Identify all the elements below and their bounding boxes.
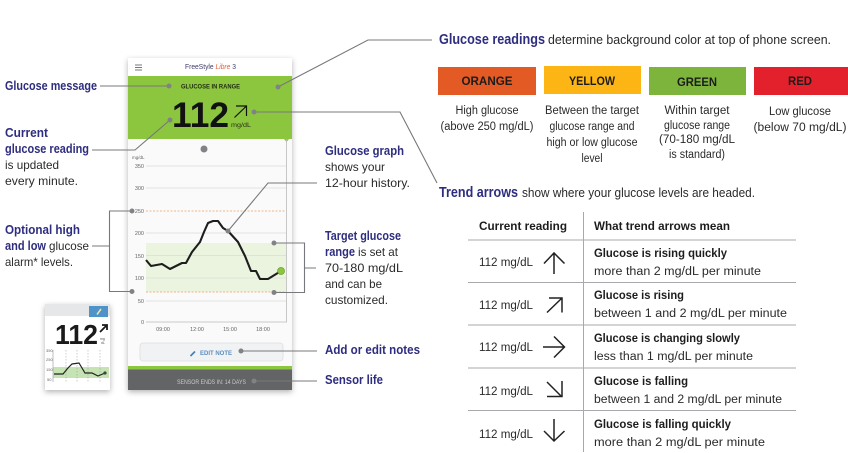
- callout: optional alarm levels: Optional high: [5, 223, 80, 237]
- green glucose banner: GLUCOSE IN RANGE: [181, 84, 241, 90]
- row: falling quickly: 112 mg/dL: [479, 429, 534, 441]
- callout: target glucose range: range: [325, 245, 355, 259]
- color key: green: [649, 67, 746, 161]
- heading: glucose readings: [276, 32, 831, 90]
- edit note button: EDIT NOTE: [200, 350, 233, 357]
- row: falling: [479, 374, 782, 406]
- heading: trend arrows: show where your glucose levels are headed.: [522, 186, 755, 200]
- row: falling: between 1 and 2 mg/dL per minute: [594, 394, 782, 406]
- callout: current glucose reading: [5, 118, 172, 188]
- glucose graph: 15:00: [223, 327, 237, 333]
- glucose graph: 09:00: [156, 327, 170, 333]
- green glucose banner: 112: [172, 96, 229, 135]
- row: changing slowly: [479, 331, 753, 363]
- callout: optional alarm levels: and low: [5, 239, 46, 253]
- table header: Current reading: [479, 219, 567, 233]
- reader device inset: mg: [100, 337, 105, 341]
- callout: target glucose range: customized.: [325, 293, 388, 307]
- heading: glucose readings: Glucose readings: [439, 32, 545, 48]
- heading: trend arrows: [252, 110, 755, 201]
- row: rising: 112 mg/dL: [479, 300, 534, 312]
- sensor life bar: SENSOR ENDS IN: 14 DAYS: [177, 380, 246, 386]
- trend arrows table: [468, 212, 796, 452]
- callout: glucose message: [5, 79, 172, 93]
- color key: green: GREEN: [677, 75, 717, 89]
- table header: [479, 219, 730, 233]
- callout: glucose graph: 12-hour history.: [325, 176, 410, 190]
- callout: glucose graph: [226, 144, 410, 234]
- phone screen: [128, 58, 292, 390]
- glucose graph: 100: [135, 276, 144, 282]
- glucose trace line: [146, 221, 281, 279]
- callout: optional alarm levels: glucose: [49, 239, 89, 253]
- row: falling quickly: [479, 417, 765, 449]
- color key: yellow: [544, 66, 641, 165]
- glucose graph: 50: [138, 299, 144, 305]
- heading: trend arrows: Trend arrows: [439, 185, 518, 201]
- row: changing slowly: less than 1 mg/dL per minute: [594, 351, 753, 363]
- color key: yellow: Between the target: [545, 105, 640, 117]
- callout: current glucose reading: every minute.: [5, 174, 78, 188]
- color key: green: Within target: [664, 105, 730, 117]
- color key: yellow: YELLOW: [569, 74, 616, 88]
- callout: sensor life: [252, 373, 383, 387]
- reader device inset: dL: [101, 341, 105, 345]
- callout: glucose graph: Glucose graph: [325, 144, 404, 158]
- callout: current glucose reading: Current: [5, 126, 49, 140]
- reader device inset: 112: [55, 319, 98, 350]
- edit note button: [140, 343, 283, 361]
- callout: optional alarm levels: [5, 208, 134, 294]
- glucose graph: mg/dL: [132, 155, 145, 160]
- glucose graph: 200: [135, 231, 144, 237]
- color key: red: [754, 67, 848, 134]
- glucose graph: 300: [135, 186, 144, 192]
- row: changing slowly: Glucose is changing slowly: [594, 331, 740, 345]
- reader device inset: 250: [46, 357, 53, 362]
- color key: red: (below 70 mg/dL): [754, 122, 847, 134]
- color key: orange: (above 250 mg/dL): [440, 121, 534, 133]
- row: rising: Glucose is rising: [594, 288, 684, 302]
- row: falling quickly: Glucose is falling quickly: [594, 417, 731, 431]
- callout: sensor life: Sensor life: [325, 373, 383, 387]
- color key: orange: High glucose: [456, 105, 518, 117]
- color key: yellow: level: [582, 153, 602, 165]
- row: falling quickly: more than 2 mg/dL per minute: [594, 437, 765, 449]
- glucose graph: 250: [135, 209, 144, 215]
- color key: green: is standard): [669, 149, 725, 161]
- row: falling: Glucose is falling: [594, 374, 688, 388]
- callout: target glucose range: is set at: [358, 245, 399, 259]
- glucose graph: [132, 139, 286, 333]
- row: falling: 112 mg/dL: [479, 386, 534, 398]
- row: rising: [479, 288, 787, 320]
- phone header bar: FreeStyle Libre 3: [185, 62, 236, 71]
- sensor life bar: [128, 366, 292, 390]
- color key: yellow: high or low glucose: [546, 137, 638, 149]
- row: rising quickly: 112 mg/dL: [479, 257, 534, 269]
- color key: orange: ORANGE: [462, 74, 512, 88]
- row: rising quickly: [479, 246, 761, 278]
- row: rising: between 1 and 2 mg/dL per minute: [594, 308, 787, 320]
- callout: target glucose range: and can be: [325, 277, 382, 291]
- green glucose banner: mg/dL: [231, 122, 251, 129]
- reader device inset: [45, 304, 110, 390]
- color key: yellow: glucose range and: [550, 121, 634, 133]
- color key: green: glucose range: [664, 120, 730, 132]
- table header: What trend arrows mean: [594, 219, 730, 233]
- graph marker dot: [200, 146, 208, 152]
- current value marker: [278, 268, 284, 274]
- callout: glucose message: Glucose message: [5, 79, 97, 93]
- callout: glucose graph: shows your: [325, 160, 385, 174]
- callout: target glucose range: Target glucose: [325, 229, 401, 243]
- heading: glucose readings: determine background color at top of phone screen.: [548, 33, 831, 47]
- glucose graph: 12:00: [190, 327, 204, 333]
- glucose graph: 18:00: [256, 327, 270, 333]
- callout: optional alarm levels: alarm* levels.: [5, 255, 73, 269]
- callout: current glucose reading: glucose reading: [5, 142, 89, 156]
- reader device inset: 350: [46, 348, 53, 353]
- color key: red: RED: [788, 74, 812, 88]
- color key: orange: [438, 67, 536, 133]
- glucose graph: 350: [135, 164, 144, 170]
- callout: current glucose reading: is updated: [5, 158, 59, 172]
- row: rising quickly: Glucose is rising quickly: [594, 246, 727, 260]
- callout: target glucose range: [272, 229, 403, 307]
- callout: add or edit notes: Add or edit notes: [325, 343, 420, 357]
- reader device inset: 50: [47, 377, 52, 382]
- color key: green: (70-180 mg/dL: [659, 134, 736, 146]
- row: rising quickly: more than 2 mg/dL per minute: [594, 266, 761, 278]
- green glucose banner: [128, 76, 292, 142]
- row: changing slowly: 112 mg/dL: [479, 342, 534, 354]
- callout: add or edit notes: [238, 343, 420, 357]
- color key: red: Low glucose: [769, 106, 831, 118]
- reader device inset: 150: [46, 367, 53, 372]
- glucose graph: 150: [135, 254, 144, 260]
- callout: target glucose range: 70-180 mg/dL: [325, 261, 403, 275]
- glucose graph: 0: [141, 320, 144, 326]
- phone header bar: [128, 58, 292, 76]
